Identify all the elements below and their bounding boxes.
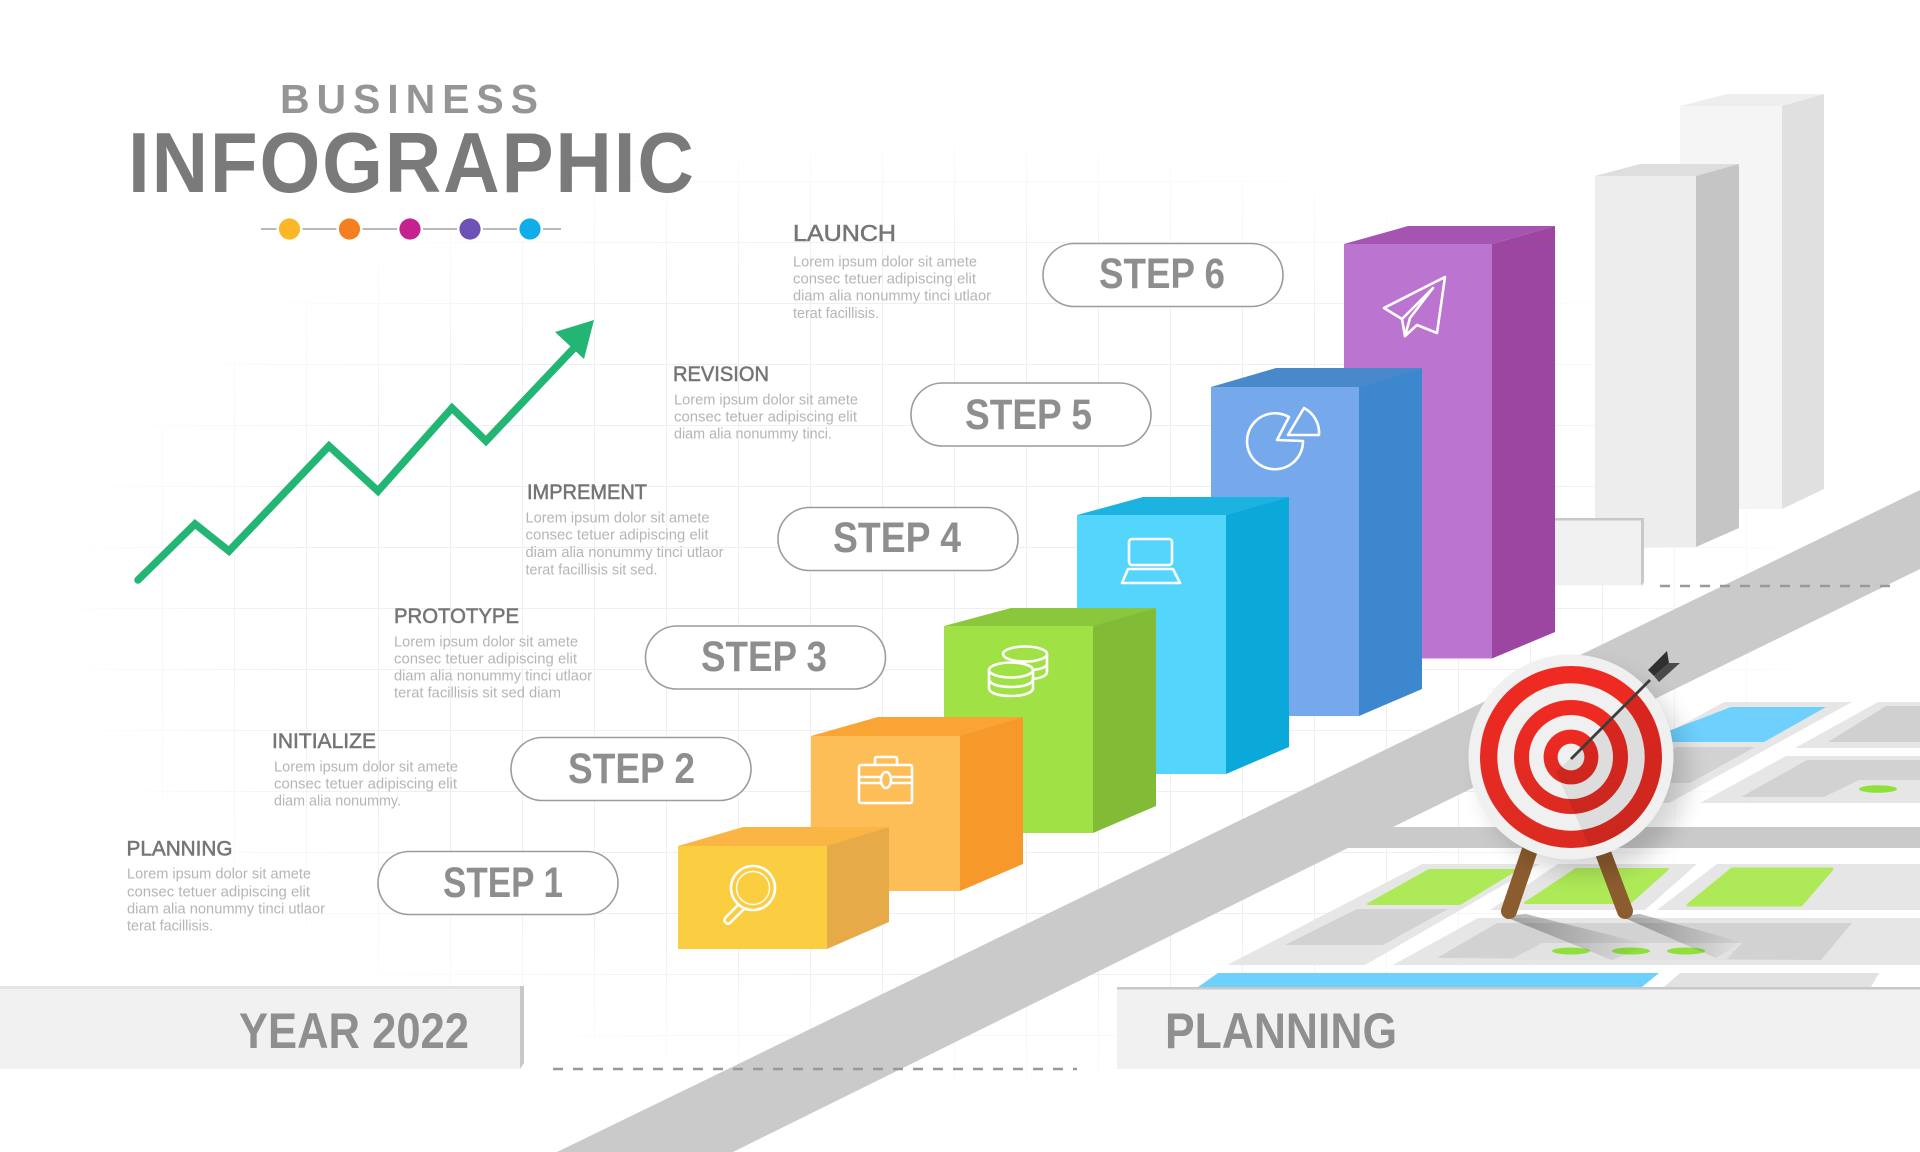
step 3 green bar	[944, 608, 1156, 833]
text block: imprement: IMPREMENT	[527, 481, 647, 504]
text block: initialize: consec tetuer adipiscing elit	[274, 776, 457, 792]
text block: launch	[793, 220, 991, 322]
title: BUSINESS	[280, 76, 538, 122]
text block: revision: consec tetuer adipiscing elit	[674, 410, 857, 426]
pill: step 6: STEP 6	[1099, 250, 1225, 298]
step 6 purple bar	[1344, 226, 1555, 658]
pill: step 1	[378, 852, 618, 914]
text block: imprement: diam alia nonummy tinci utlaor	[526, 545, 724, 561]
target with arrow	[1468, 651, 1742, 960]
dashed line top right	[1660, 585, 1898, 587]
text block: prototype: PROTOTYPE	[394, 605, 519, 628]
dashed line bottom	[553, 1068, 1077, 1070]
pill: step 2	[511, 738, 751, 800]
text block: planning	[126, 838, 325, 934]
pill: step 5	[911, 383, 1151, 446]
text block: imprement: Lorem ipsum dolor sit amete	[526, 510, 710, 526]
text block: planning: Lorem ipsum dolor sit amete	[127, 866, 311, 882]
map parcels	[1198, 702, 1920, 987]
pill: step 4	[778, 508, 1018, 570]
panel: planning: PLANNING	[1165, 1003, 1397, 1059]
text block: planning: consec tetuer adipiscing elit	[127, 884, 310, 900]
icon: magnifier	[724, 866, 775, 924]
text block: prototype: Lorem ipsum dolor sit amete	[394, 634, 578, 650]
text block: revision: REVISION	[673, 363, 769, 386]
step pills	[378, 244, 1283, 914]
text block: launch: consec tetuer adipiscing elit	[793, 272, 976, 288]
text block: revision	[673, 363, 858, 442]
panel: year 2022	[0, 986, 524, 1069]
step 1 yellow box	[678, 827, 889, 949]
text block: launch: terat facillisis.	[793, 306, 879, 322]
title: INFOGRAPHIC	[128, 116, 694, 211]
text block: launch: LAUNCH	[793, 220, 896, 246]
pill: step 3: STEP 3	[701, 633, 827, 681]
pill: step 2: STEP 2	[568, 745, 695, 793]
small grey panel behind purple bar	[1540, 518, 1644, 586]
pill: step 6	[1043, 244, 1283, 306]
text block: planning: PLANNING	[126, 838, 232, 860]
icon: briefcase	[859, 757, 912, 803]
text block: prototype: diam alia nonummy tinci utlaor	[394, 668, 592, 684]
background grey bars	[1595, 94, 1824, 547]
colour dots divider	[261, 216, 561, 242]
text block: imprement	[526, 481, 724, 578]
icon: laptop	[1122, 539, 1180, 583]
text block: imprement: terat facillisis sit sed.	[526, 562, 658, 578]
text block: initialize: diam alia nonummy.	[274, 794, 401, 810]
text block: revision: Lorem ipsum dolor sit amete	[674, 392, 858, 408]
step 4 cyan bar	[1077, 497, 1289, 774]
text block: prototype: consec tetuer adipiscing elit	[394, 652, 577, 668]
text block: launch: diam alia nonummy tinci utlaor	[793, 288, 991, 304]
text block: planning: terat facillisis.	[127, 918, 213, 934]
icon: pie chart	[1247, 408, 1319, 469]
text block: imprement: consec tetuer adipiscing elit	[526, 528, 708, 544]
text block: prototype	[394, 605, 592, 702]
step 5 blue bar	[1211, 368, 1422, 716]
pill: step 5: STEP 5	[965, 391, 1092, 439]
pill: step 4: STEP 4	[833, 514, 961, 562]
icon: coins	[989, 646, 1047, 696]
icon: paper plane	[1384, 277, 1445, 336]
text block: initialize: Lorem ipsum dolor sit amete	[274, 760, 458, 776]
pill: step 3	[646, 626, 886, 689]
text block: initialize: INITIALIZE	[272, 730, 376, 753]
text block: prototype: terat facillisis sit sed diam	[394, 686, 561, 702]
panel: planning	[1117, 987, 1920, 1069]
panel: year 2022: YEAR 2022	[239, 1003, 469, 1059]
green growth arrow	[138, 320, 594, 580]
text block: launch: Lorem ipsum dolor sit amete	[793, 254, 977, 270]
text block: revision: diam alia nonummy tinci.	[674, 426, 832, 442]
text block: planning: diam alia nonummy tinci utlaor	[127, 902, 325, 918]
text block: initialize	[272, 730, 458, 810]
step 2 orange box	[811, 717, 1023, 891]
diagonal grey road	[557, 490, 1920, 1152]
pill: step 1: STEP 1	[443, 859, 563, 907]
